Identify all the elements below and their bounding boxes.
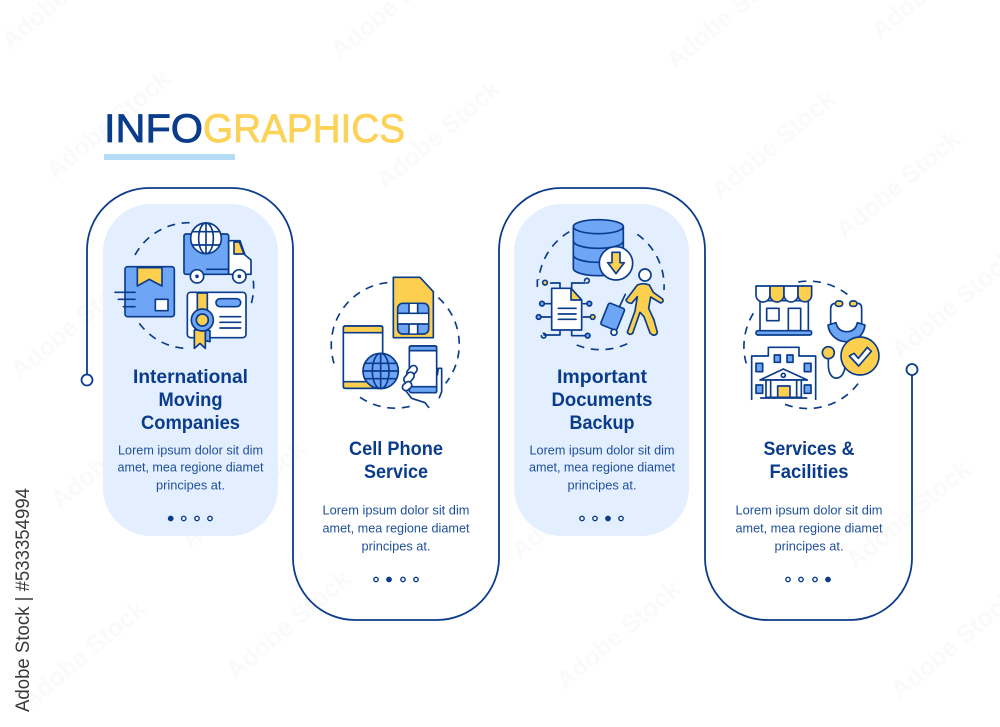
card 1 body text: [118, 442, 264, 492]
text: Adobe Stock: [221, 565, 356, 685]
card 2 body text: principes at.: [362, 538, 430, 554]
card 3 body text: Lorem ipsum dolor sit dim: [530, 442, 674, 458]
text: Adobe Stock: [371, 75, 506, 195]
card 4 body text: principes at.: [774, 538, 844, 554]
card 4 heading: [764, 439, 855, 483]
text: Adobe Stock: [46, 395, 181, 515]
card 3 body text: [529, 442, 675, 492]
card 2 heading: [349, 439, 443, 483]
card 2 heading: Cell Phone: [349, 439, 443, 460]
card 2 body text: amet, mea regione diamet: [322, 520, 470, 536]
card 3 body text: amet, mea regione diamet: [529, 460, 675, 474]
panel background: card 1: [103, 204, 278, 536]
card 2 pagination dots: [374, 577, 418, 582]
text: Adobe Stock: [6, 265, 141, 385]
text: Adobe Stock: [841, 455, 976, 575]
card 4 body text: amet, mea regione diamet: [736, 520, 883, 536]
title underline: [104, 154, 235, 160]
text: Adobe Stock: [551, 575, 686, 695]
card 1 heading: Companies: [141, 413, 240, 434]
icon: cell phone service: [331, 277, 459, 408]
card 1 heading: [133, 367, 248, 434]
card 3 body text: principes at.: [568, 478, 636, 492]
card 4 heading: Facilities: [770, 462, 848, 483]
card 4 body text: Lorem ipsum dolor sit dim: [736, 502, 882, 518]
card 4 heading: Services &: [764, 439, 855, 460]
text: Adobe Stock: [176, 435, 311, 555]
card 1 pagination dots: [168, 516, 212, 521]
text: Adobe Stock: [506, 445, 641, 565]
card 1 body text: principes at.: [156, 478, 225, 492]
card 1 heading: Moving: [158, 390, 222, 411]
icon: documents backup: [536, 220, 664, 350]
stock credit: Adobe Stock | #533354994: [13, 488, 34, 712]
card 2 body text: Lorem ipsum dolor sit dim: [322, 502, 470, 518]
card 1 body text: amet, mea regione diamet: [118, 460, 264, 474]
icon: moving companies: [115, 223, 254, 348]
panel background: card 3: [514, 204, 689, 536]
card 4 body text: [736, 502, 883, 554]
card 3 heading: Important: [557, 367, 648, 388]
card 3 heading: Documents: [552, 390, 652, 411]
card 3 pagination dots: [580, 516, 623, 521]
icon: services and facilities: [744, 281, 879, 409]
connecting outline: [82, 188, 918, 620]
text: Adobe Stock: [41, 65, 176, 185]
card 1 heading: International: [133, 367, 248, 388]
card 3 heading: Backup: [570, 413, 634, 434]
card 1 body text: Lorem ipsum dolor sit dim: [118, 442, 263, 458]
card 3 heading: [552, 367, 652, 434]
card 2 heading: Service: [364, 462, 428, 483]
title: GRAPHICS: [203, 107, 405, 151]
text: Adobe Stock: [16, 595, 151, 715]
title: [104, 107, 405, 151]
card 4 pagination dots: [786, 577, 830, 582]
title: INFO: [104, 107, 203, 151]
card 2 body text: [322, 502, 470, 554]
text: Adobe Stock: [706, 85, 841, 205]
text: Adobe Stock: [831, 125, 966, 245]
